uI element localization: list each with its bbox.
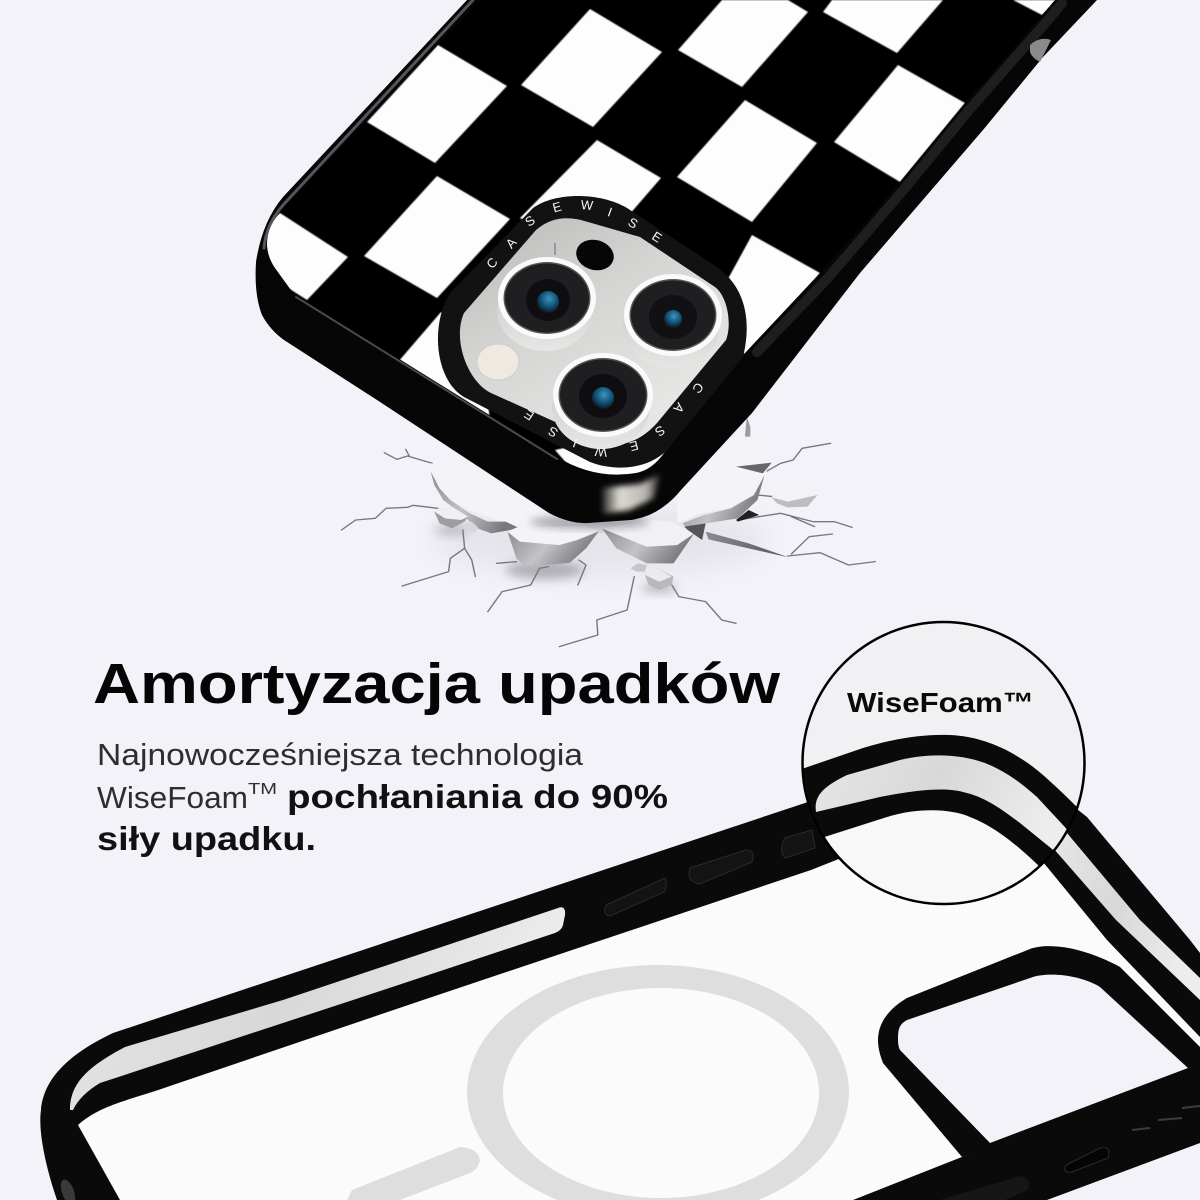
lens 3 [552, 353, 653, 449]
rim lettering: bottom: S [545, 423, 561, 441]
lidar hole [573, 236, 617, 274]
clear back panel [78, 800, 1200, 1200]
rim lettering: top: C [483, 255, 501, 271]
description text: pochłaniania do 90% [287, 778, 668, 815]
right foam strip [1053, 833, 1200, 1000]
bumper silhouette [40, 740, 1200, 1200]
rim lettering: bottom: E [521, 406, 537, 424]
small stone right [772, 485, 817, 507]
corner reflection [602, 474, 660, 514]
small chips left [434, 507, 468, 528]
checkered pattern [250, 0, 1080, 490]
lens 2 [623, 274, 722, 368]
crack lines [341, 443, 875, 647]
magnifier circle: WiseFoam detail [801, 620, 1086, 906]
description text [97, 737, 668, 857]
description text: siły upadku. [97, 820, 316, 857]
magnetic tab [347, 1147, 480, 1200]
rim lettering: bottom: C [689, 380, 707, 396]
soft shadows under plates [506, 561, 584, 579]
description text: WiseFoam [97, 780, 248, 815]
left foam strip [70, 907, 565, 1110]
illustration: cracked ground [341, 417, 875, 647]
central right plate [602, 528, 694, 563]
rim lettering: top: E [551, 199, 563, 215]
rim lettering: top: W [580, 197, 594, 213]
rim lettering: top [483, 197, 665, 271]
side buttons top rail [605, 830, 815, 916]
title: Amortyzacja upadków [93, 652, 781, 716]
description text: TM [248, 781, 277, 798]
circle label: WiseFoam™ [847, 687, 1034, 718]
chips below [631, 563, 647, 572]
phone body silhouette [256, 0, 1097, 523]
rail buttons and port [58, 1106, 1200, 1200]
description text: Najnowocześniejsza technologia [97, 737, 584, 772]
rim lettering: top: I [606, 204, 614, 220]
right big plate [677, 437, 768, 523]
rim lettering: bottom: I [571, 435, 579, 451]
rim lettering: bottom: S [652, 422, 668, 440]
lower phone case: clear bumper [40, 740, 1200, 1200]
silver phone body [460, 218, 729, 445]
central left plate [507, 532, 599, 565]
edge highlights [264, 0, 1062, 459]
side button highlight [1030, 39, 1051, 62]
rim lettering: top: A [503, 235, 520, 251]
rim lettering: top: E [649, 228, 665, 246]
small microphone [554, 243, 556, 255]
phone with checkered case [250, 0, 1097, 523]
left shard [431, 463, 584, 527]
rim lettering: top: S [625, 214, 641, 232]
flash [477, 344, 519, 380]
camera island [438, 196, 747, 468]
camera cutout frame [878, 946, 1200, 1157]
rim lettering: bottom: W [594, 444, 608, 460]
rim lettering: top: S [522, 212, 538, 230]
rim lettering: bottom [521, 380, 707, 460]
lens 1 [497, 257, 596, 351]
magnetic ring [467, 965, 849, 1200]
rim lettering: bottom: A [670, 400, 688, 416]
rim lettering: bottom: E [628, 438, 640, 454]
